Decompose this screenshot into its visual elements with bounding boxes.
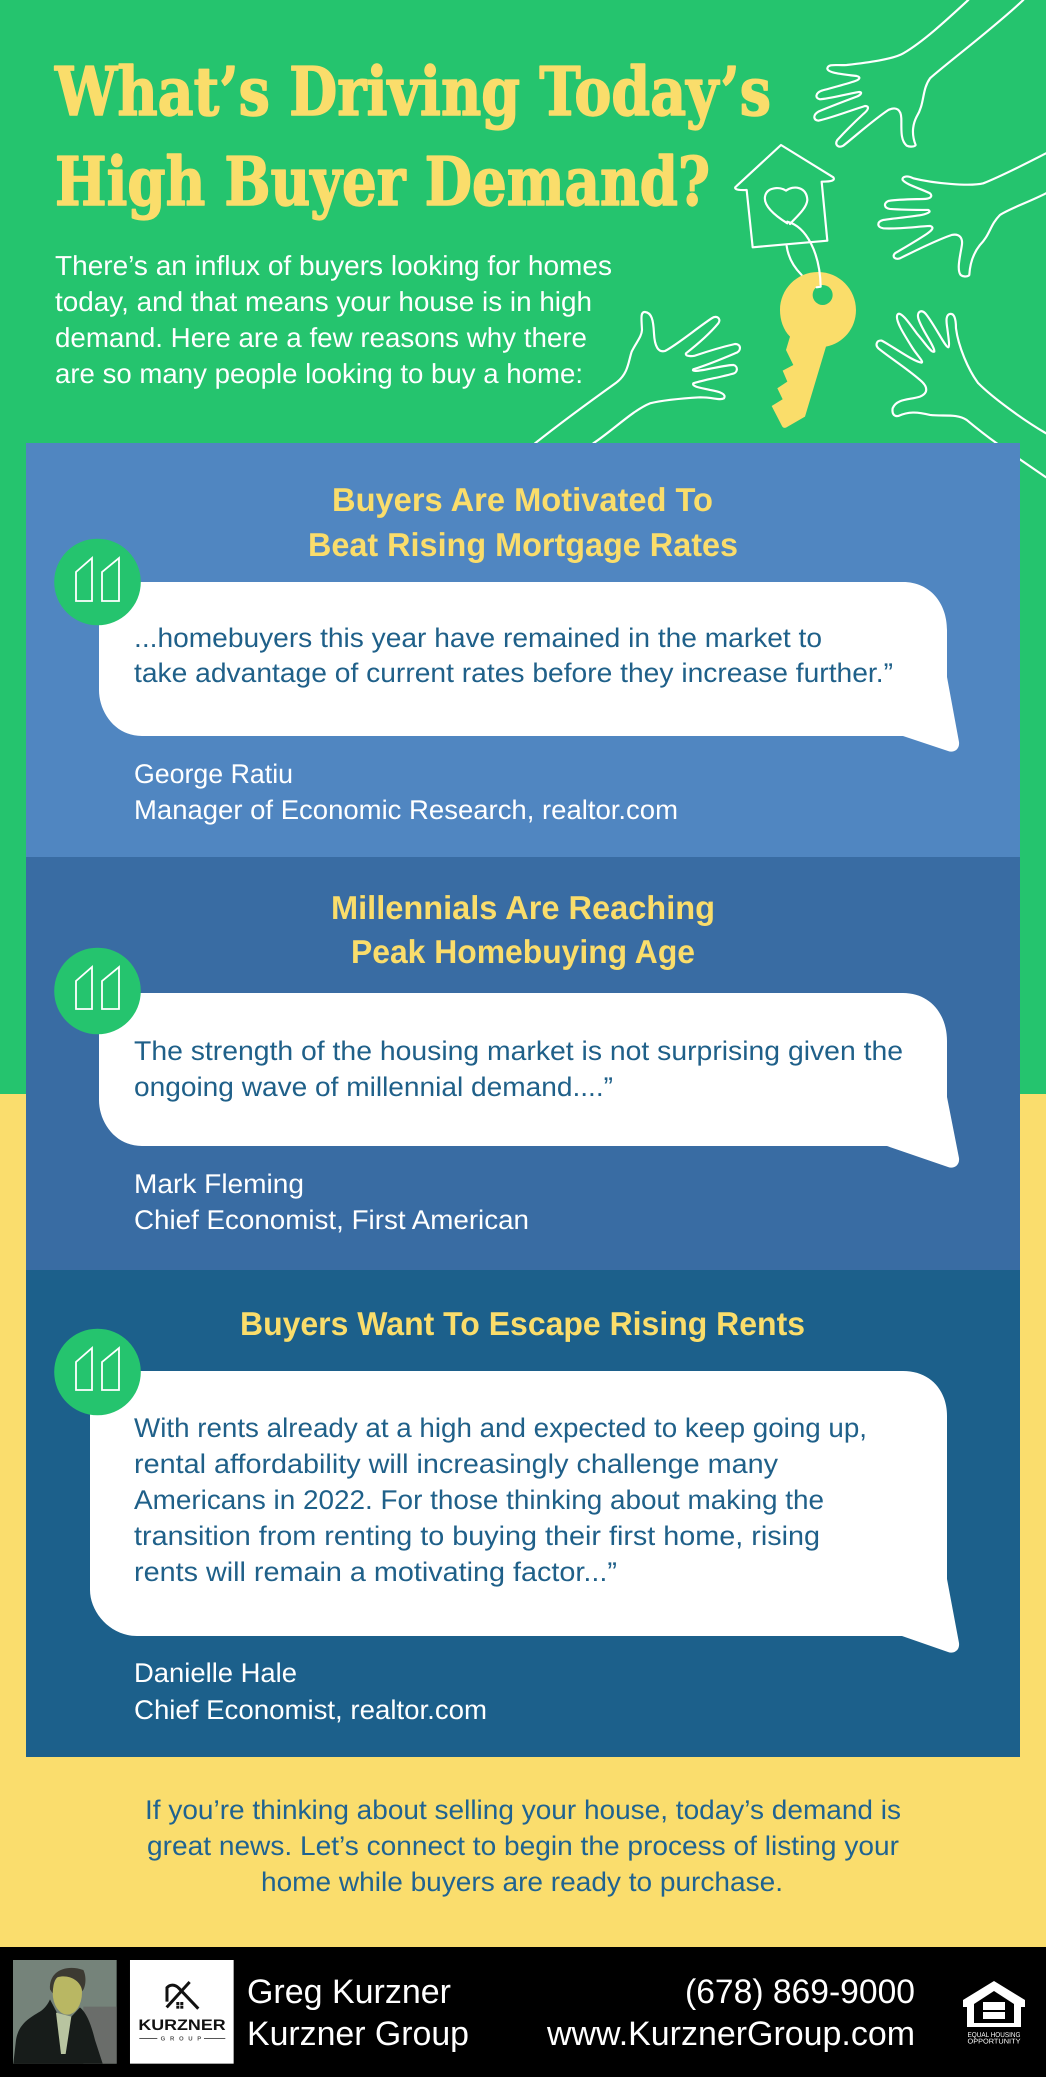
quote text: Americans in 2022. For those thinking about making the xyxy=(134,1485,824,1515)
icon: yellow key xyxy=(772,222,856,428)
company logo: KURZNER xyxy=(138,2016,226,2033)
panel: rising rents xyxy=(26,1270,1020,1757)
agent name and company xyxy=(247,1973,469,2053)
quote text: The strength of the housing market is not surprising given the xyxy=(134,1036,903,1066)
icon: hand bottom left xyxy=(535,312,740,443)
attribution: Chief Economist, First American xyxy=(134,1205,529,1235)
quote text: ...homebuyers this year have remained in the market to xyxy=(134,623,822,653)
contact details: (678) 869-9000 xyxy=(685,1973,915,2011)
attribution xyxy=(134,1658,487,1725)
background: green upper xyxy=(0,0,1046,1094)
background: yellow lower xyxy=(0,1094,1046,1947)
icon: house with heart xyxy=(735,145,834,275)
intro text xyxy=(55,250,612,389)
heading: Beat Rising Mortgage Rates xyxy=(308,526,738,563)
intro text: demand. Here are a few reasons why there xyxy=(55,322,587,353)
speech bubble xyxy=(90,1371,959,1653)
heading: Peak Homebuying Age xyxy=(351,933,695,970)
quote text: transition from renting to buying their first home, rising xyxy=(134,1521,820,1551)
heading: Buyers Want To Escape Rising Rents xyxy=(240,1305,805,1342)
attribution xyxy=(134,1169,529,1235)
illustration: hands reaching for house key xyxy=(535,0,1046,477)
closing call to action: home while buyers are ready to purchase. xyxy=(261,1867,783,1897)
title: What’s Driving Today’s xyxy=(54,52,771,131)
agent name and company: Greg Kurzner xyxy=(247,1973,451,2011)
contact details xyxy=(546,1973,915,2053)
company logo: GROUP xyxy=(161,2035,201,2042)
attribution: Manager of Economic Research, realtor.com xyxy=(134,795,678,825)
attribution: Chief Economist, realtor.com xyxy=(134,1695,487,1725)
icon: equal housing opportunity: OPPORTUNITY xyxy=(968,2038,1021,2046)
icon: hand middle right xyxy=(878,153,1046,276)
icon: quotation mark badge xyxy=(54,948,141,1034)
intro text: are so many people looking to buy a home: xyxy=(55,358,583,389)
heading: Buyers Are Motivated To xyxy=(332,481,713,518)
agent photo xyxy=(13,1960,117,2064)
attribution: George Ratiu xyxy=(134,759,293,789)
company logo xyxy=(130,1960,234,2064)
icon: equal housing opportunity xyxy=(963,1981,1025,2046)
intro text: today, and that means your house is in high xyxy=(55,286,592,317)
panel: millennials xyxy=(26,857,1020,1270)
quote text xyxy=(134,1036,903,1102)
quote text: rents will remain a motivating factor...” xyxy=(134,1557,617,1587)
agent name and company: Kurzner Group xyxy=(247,2015,469,2053)
closing call to action xyxy=(145,1795,901,1897)
icon: hand bottom right xyxy=(877,311,1046,477)
speech bubble xyxy=(99,993,959,1168)
speech bubble xyxy=(99,582,959,752)
quote text xyxy=(134,623,893,688)
quote text: With rents already at a high and expected to keep going up, xyxy=(134,1413,867,1443)
attribution: Mark Fleming xyxy=(134,1169,304,1199)
closing call to action: great news. Let’s connect to begin the process of listing your xyxy=(147,1831,899,1861)
heading xyxy=(308,481,738,563)
icon: equal housing opportunity: EQUAL HOUSING xyxy=(968,2032,1020,2039)
quote text: take advantage of current rates before they increase further.” xyxy=(134,658,893,688)
quote text xyxy=(134,1413,867,1587)
quote text: rental affordability will increasingly challenge many xyxy=(134,1449,779,1479)
intro text: There’s an influx of buyers looking for homes xyxy=(55,250,612,281)
heading xyxy=(331,889,715,970)
attribution xyxy=(134,759,678,825)
title xyxy=(54,52,771,221)
quote text: ongoing wave of millennial demand....” xyxy=(134,1072,613,1102)
icon: hand top right xyxy=(814,0,1023,147)
attribution: Danielle Hale xyxy=(134,1658,297,1688)
heading: Millennials Are Reaching xyxy=(331,889,715,926)
icon: quotation mark badge xyxy=(54,1329,141,1415)
title: High Buyer Demand? xyxy=(55,142,710,221)
panel: motivated buyers xyxy=(26,443,1020,857)
footer bar xyxy=(0,1947,1046,2077)
closing call to action: If you’re thinking about selling your house, today’s demand is xyxy=(145,1795,901,1825)
contact details: www.KurznerGroup.com xyxy=(546,2015,915,2053)
icon: quotation mark badge xyxy=(54,539,141,625)
